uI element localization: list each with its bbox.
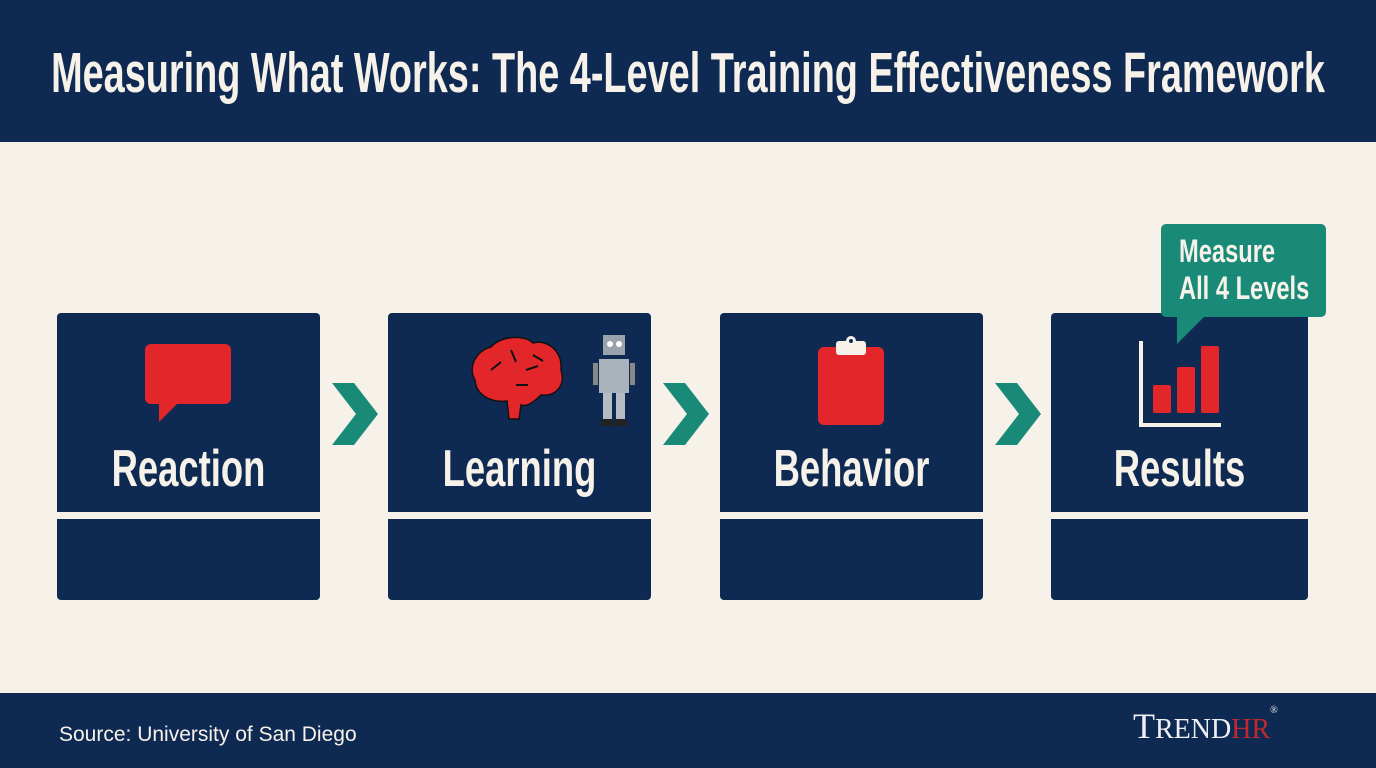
icon: robot — [593, 335, 635, 426]
icon: bar chart — [1139, 341, 1221, 427]
callout: measure all 4 levels: All 4 Levels — [1179, 270, 1309, 306]
label: behavior: Behavior — [774, 440, 929, 498]
arrow 1 — [332, 383, 378, 445]
icon: brain — [471, 336, 563, 420]
title: Measuring What Works: The 4-Level Training Effectiveness Framework — [51, 41, 1325, 105]
panel: results — [1051, 313, 1308, 600]
panel: behavior — [720, 313, 983, 600]
label: reaction: Reaction — [112, 440, 265, 498]
label: results: Results — [1114, 440, 1245, 498]
callout: measure all 4 levels: Measure — [1179, 233, 1275, 269]
footer — [0, 693, 1376, 768]
panel: reaction — [57, 313, 320, 600]
panel: learning — [388, 313, 651, 600]
source text: Source: University of San Diego — [59, 723, 357, 746]
arrow 3 — [995, 383, 1041, 445]
callout: measure all 4 levels — [1161, 224, 1326, 317]
arrow 2 — [663, 383, 709, 445]
icon: clipboard — [818, 336, 884, 425]
header band — [0, 0, 1376, 142]
logo: TrendHR: TRENDHR® — [1133, 705, 1278, 746]
icon: speech bubble — [145, 344, 231, 422]
label: learning: Learning — [443, 440, 596, 498]
